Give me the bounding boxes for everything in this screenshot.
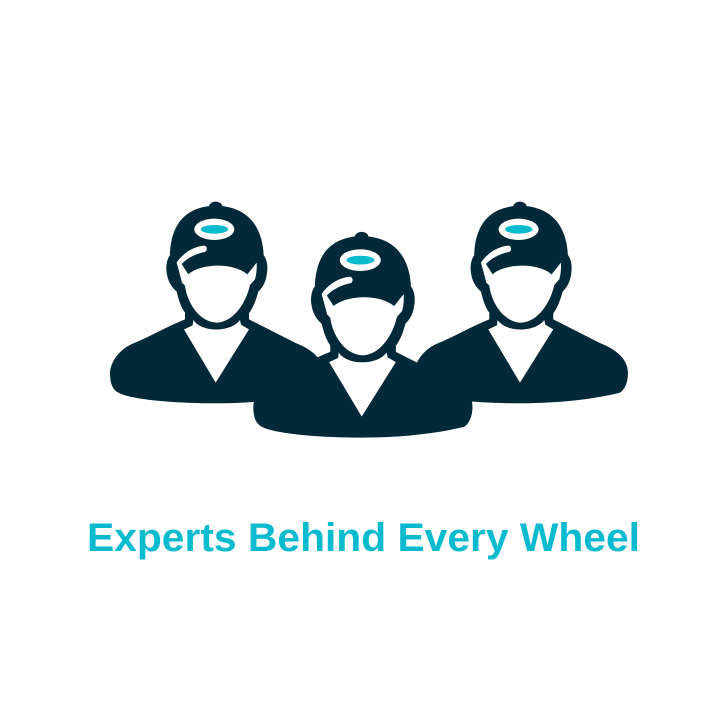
icon: left technician — [110, 202, 324, 403]
icon: centre technician — [253, 232, 472, 438]
icon: right technician — [414, 202, 628, 403]
title: Experts Behind Every Wheel — [87, 516, 640, 560]
